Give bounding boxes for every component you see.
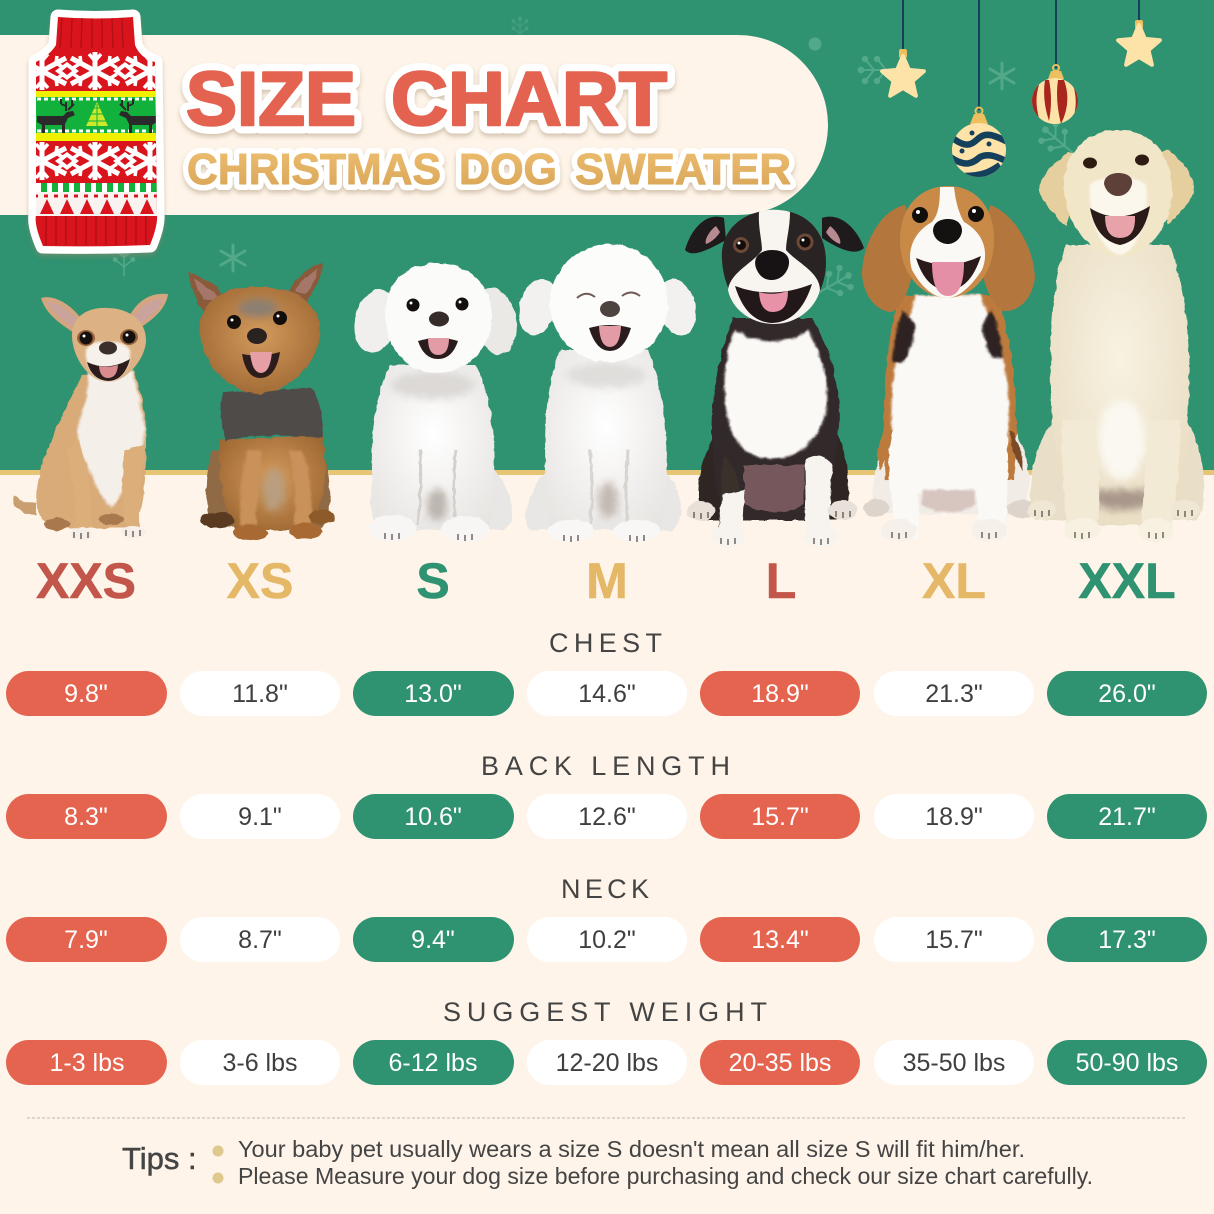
tip text 2: Please Measure your dog size before purchasing and check our size chart carefully.	[238, 1163, 1093, 1189]
dog XL: beagle	[862, 186, 1037, 541]
tips label: Tips :	[122, 1141, 197, 1176]
row: neck values: 13.4"	[751, 926, 809, 954]
row: chest values: 18.9"	[751, 680, 809, 708]
row: chest values: 14.6"	[578, 680, 636, 708]
row: suggest weight values: 3-6 lbs	[222, 1049, 298, 1077]
row: back length values: 10.6"	[404, 803, 462, 831]
dog XXS: chihuahua	[13, 294, 168, 541]
size M: M	[586, 553, 628, 609]
dog L: black and white mix	[685, 210, 864, 547]
ornament: striped bauble	[1032, 0, 1080, 124]
row: suggest weight values: 1-3 lbs	[49, 1049, 125, 1077]
heading: neck: NECK	[561, 874, 649, 904]
subtitle: CHRISTMAS DOG SWEATER: SWEATER	[575, 145, 791, 194]
heading: suggest weight: SUGGEST WEIGHT	[443, 997, 767, 1027]
row: neck values: 8.7"	[238, 926, 282, 954]
title: SIZE CHART: CHART	[391, 57, 667, 142]
background: cream floor with gold line	[0, 470, 1214, 1214]
dog XXL: labrador	[1028, 130, 1204, 542]
subtitle: CHRISTMAS DOG SWEATER: CHRISTMAS	[187, 145, 441, 194]
row: back length values: 18.9"	[925, 803, 983, 831]
row: suggest weight values: 20-35 lbs	[729, 1049, 831, 1077]
subtitle: CHRISTMAS DOG SWEATER: DOG	[459, 145, 557, 194]
subtitle: CHRISTMAS DOG SWEATER: CHRISTMAS	[187, 145, 441, 194]
tips	[122, 1136, 1093, 1189]
row: chest values	[6, 671, 1207, 716]
size XL: XL	[922, 553, 986, 609]
row: suggest weight values: 50-90 lbs	[1076, 1049, 1178, 1077]
title banner	[0, 35, 828, 215]
row: chest values: 9.8"	[64, 680, 108, 708]
sweater sticker	[18, 10, 174, 250]
row: suggest weight values	[6, 1040, 1207, 1085]
row: chest values: 13.0"	[404, 680, 462, 708]
ornament: hanging star left	[882, 0, 924, 96]
size labels	[36, 553, 1176, 609]
decorative snowflakes	[113, 17, 1082, 305]
ornament: wavy bauble	[950, 0, 1008, 177]
title: SIZE CHART: SIZE	[186, 57, 356, 142]
row: back length values: 9.1"	[238, 803, 282, 831]
row: back length values: 15.7"	[751, 803, 809, 831]
tip bullet 2	[212, 1172, 224, 1184]
dog XS: yorkie	[188, 263, 335, 541]
title: SIZE CHART: CHART	[391, 57, 667, 142]
heading: chest: CHEST	[549, 628, 662, 658]
background: green wall	[0, 0, 1214, 472]
size L: L	[766, 553, 796, 609]
row: neck values: 10.2"	[578, 926, 636, 954]
row: chest values: 11.8"	[232, 680, 288, 708]
row: neck values: 7.9"	[64, 926, 108, 954]
row: neck values: 15.7"	[925, 926, 983, 954]
row: neck values: 17.3"	[1098, 926, 1156, 954]
subtitle: CHRISTMAS DOG SWEATER	[187, 145, 791, 194]
title: SIZE CHART: SIZE	[186, 57, 356, 142]
row: suggest weight values: 12-20 lbs	[556, 1049, 658, 1077]
row: back length values: 21.7"	[1098, 803, 1156, 831]
title: SIZE CHART	[186, 57, 667, 142]
row: suggest weight values: 35-50 lbs	[903, 1049, 1005, 1077]
row: chest values: 21.3"	[925, 680, 983, 708]
tip text 1: Your baby pet usually wears a size S doesn't mean all size S will fit him/her.	[238, 1136, 1025, 1162]
size XS: XS	[227, 553, 293, 609]
dog S: maltese	[349, 263, 523, 542]
subtitle: CHRISTMAS DOG SWEATER: DOG	[459, 145, 557, 194]
row: neck values	[6, 917, 1207, 962]
tip bullet 1	[212, 1146, 224, 1156]
ornament: hanging star right	[1118, 0, 1160, 65]
heading: back length: BACK LENGTH	[481, 751, 730, 781]
size S: S	[416, 553, 450, 609]
row: neck values: 9.4"	[411, 926, 455, 954]
row: chest values: 26.0"	[1098, 680, 1156, 708]
row: suggest weight values: 6-12 lbs	[389, 1049, 477, 1077]
row: back length values: 8.3"	[64, 803, 108, 831]
subtitle: CHRISTMAS DOG SWEATER: SWEATER	[575, 145, 791, 194]
row: back length values: 12.6"	[578, 803, 636, 831]
dog M: bichon	[514, 244, 701, 542]
size XXL: XXL	[1078, 553, 1176, 609]
size XXS: XXS	[36, 553, 136, 609]
row: back length values	[6, 794, 1207, 839]
